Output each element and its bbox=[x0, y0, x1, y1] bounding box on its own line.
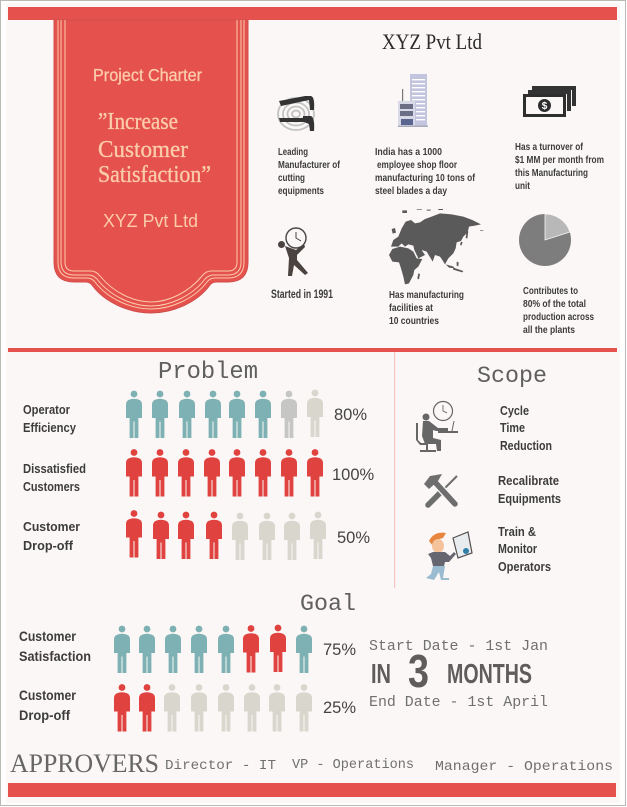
timeline callout: 3 bbox=[408, 645, 429, 697]
row: customer satisfaction: 75% bbox=[323, 641, 356, 659]
banner quote: Satisfaction” bbox=[98, 162, 211, 188]
approvers: APPROVERS bbox=[10, 749, 159, 778]
text: cycle time reduction: Cycle bbox=[500, 403, 529, 418]
timeline callout: MONTHS bbox=[447, 658, 532, 689]
row: dissatisfied customers: Dissatisfied bbox=[23, 461, 86, 476]
panel: project charter banner bbox=[54, 20, 248, 313]
icon: hammer and screwdriver bbox=[424, 474, 457, 505]
row: operator efficiency: 80% bbox=[334, 406, 367, 424]
text: recalibrate equipments bbox=[498, 473, 561, 506]
timeline callout bbox=[369, 638, 548, 711]
text: cycle time reduction: Reduction bbox=[500, 438, 552, 453]
text: facilities: Has manufacturing bbox=[389, 289, 464, 301]
text: shop floor bbox=[375, 146, 475, 197]
approvers: Director - IT bbox=[165, 758, 276, 774]
banner quote: ”Increase bbox=[98, 109, 178, 135]
text: cycle time reduction bbox=[500, 403, 552, 453]
top bar bbox=[8, 7, 617, 20]
text: leading manufacturer: Manufacturer of bbox=[278, 159, 340, 171]
text: facilities: facilities at bbox=[389, 302, 433, 314]
row: customer satisfaction: Satisfaction bbox=[19, 649, 91, 664]
text: turnover: this Manufacturing bbox=[515, 167, 588, 179]
icon: office building bbox=[398, 74, 428, 127]
text: turnover: unit bbox=[515, 180, 530, 192]
approvers: Manager - Operations bbox=[435, 759, 613, 775]
timeline callout: End Date - 1st April bbox=[369, 694, 548, 711]
row: customer drop-off bbox=[23, 510, 370, 560]
text: shop floor: India has a 1000 bbox=[375, 146, 442, 158]
banner quote: Customer bbox=[98, 137, 188, 163]
text: leading manufacturer bbox=[278, 146, 340, 197]
approvers bbox=[10, 749, 613, 778]
icon: worker at desk with clock bbox=[416, 402, 458, 452]
icon: man carrying clock bbox=[278, 228, 308, 276]
middle divider bar bbox=[8, 348, 617, 352]
text: contribution bbox=[523, 285, 594, 336]
text: started in 1991: Started in 1991 bbox=[271, 287, 333, 301]
row: customer satisfaction bbox=[19, 625, 356, 673]
row: customer drop-off: Customer bbox=[23, 519, 80, 534]
row: operator efficiency: Efficiency bbox=[23, 420, 77, 435]
text: contribution: all the plants bbox=[523, 324, 575, 336]
text: train and monitor operators: Monitor bbox=[498, 541, 537, 556]
row: goal customer drop-off: Drop-off bbox=[19, 708, 70, 723]
text: shop floor: employee shop floor bbox=[377, 159, 457, 171]
row: goal customer drop-off: 25% bbox=[323, 699, 356, 717]
text: turnover bbox=[515, 141, 604, 192]
row: customer drop-off: 50% bbox=[337, 529, 370, 547]
icon: stack of money bbox=[524, 86, 576, 116]
panel: goal bbox=[19, 591, 356, 732]
scope heading: Scope bbox=[477, 363, 547, 389]
text: leading manufacturer: Leading bbox=[278, 146, 308, 158]
row: dissatisfied customers: 100% bbox=[332, 466, 375, 484]
row: operator efficiency bbox=[23, 390, 367, 438]
company title: XYZ Pvt Ltd bbox=[382, 29, 482, 54]
row: customer drop-off: Drop-off bbox=[23, 538, 74, 553]
goal heading: Goal bbox=[300, 591, 356, 617]
banner heading: Project Charter bbox=[93, 65, 202, 85]
banner quote bbox=[98, 109, 211, 188]
text: contribution: Contributes to bbox=[523, 285, 578, 297]
row: operator efficiency: Operator bbox=[23, 402, 70, 417]
text: turnover: $1 MM per month from bbox=[515, 154, 604, 166]
icon: saw blade bbox=[278, 96, 314, 131]
banner company name: XYZ Pvt Ltd bbox=[103, 211, 198, 231]
problem heading: Problem bbox=[158, 359, 258, 386]
text: recalibrate equipments: Recalibrate bbox=[498, 473, 559, 488]
icon: stack of money: $ bbox=[542, 101, 548, 112]
text: recalibrate equipments: Equipments bbox=[498, 491, 561, 506]
panel: scope bbox=[416, 363, 561, 580]
text: train and monitor operators: Operators bbox=[498, 559, 551, 574]
row: goal customer drop-off: Customer bbox=[19, 688, 77, 703]
text: leading manufacturer: equipments bbox=[278, 185, 324, 197]
row: goal customer drop-off bbox=[19, 684, 356, 732]
icon: world map bbox=[389, 209, 483, 284]
text: train and monitor operators bbox=[498, 524, 551, 574]
icon: trainer with chart bbox=[426, 532, 472, 580]
timeline callout: Start Date - 1st Jan bbox=[369, 638, 548, 655]
row: customer satisfaction: Customer bbox=[19, 629, 77, 644]
panel: problem bbox=[23, 359, 375, 560]
text: train and monitor operators: Train & bbox=[498, 524, 536, 539]
text: contribution: 80% of the total bbox=[523, 298, 586, 310]
bottom bar bbox=[8, 783, 616, 797]
text: contribution: production across bbox=[523, 311, 594, 323]
text: cycle time reduction: Time bbox=[500, 420, 525, 435]
approvers: VP - Operations bbox=[292, 757, 414, 773]
timeline callout: IN bbox=[371, 658, 391, 689]
icon: pie chart bbox=[519, 214, 571, 266]
text: facilities bbox=[389, 289, 464, 327]
text: shop floor: manufacturing 10 tons of bbox=[375, 172, 475, 184]
text: turnover: Has a turnover of bbox=[515, 141, 583, 153]
text: leading manufacturer: cutting bbox=[278, 172, 305, 184]
text: shop floor: steel blades a day bbox=[375, 185, 447, 197]
text: facilities: 10 countries bbox=[389, 315, 439, 327]
row: dissatisfied customers: Customers bbox=[23, 479, 80, 494]
row: dissatisfied customers bbox=[23, 449, 375, 496]
